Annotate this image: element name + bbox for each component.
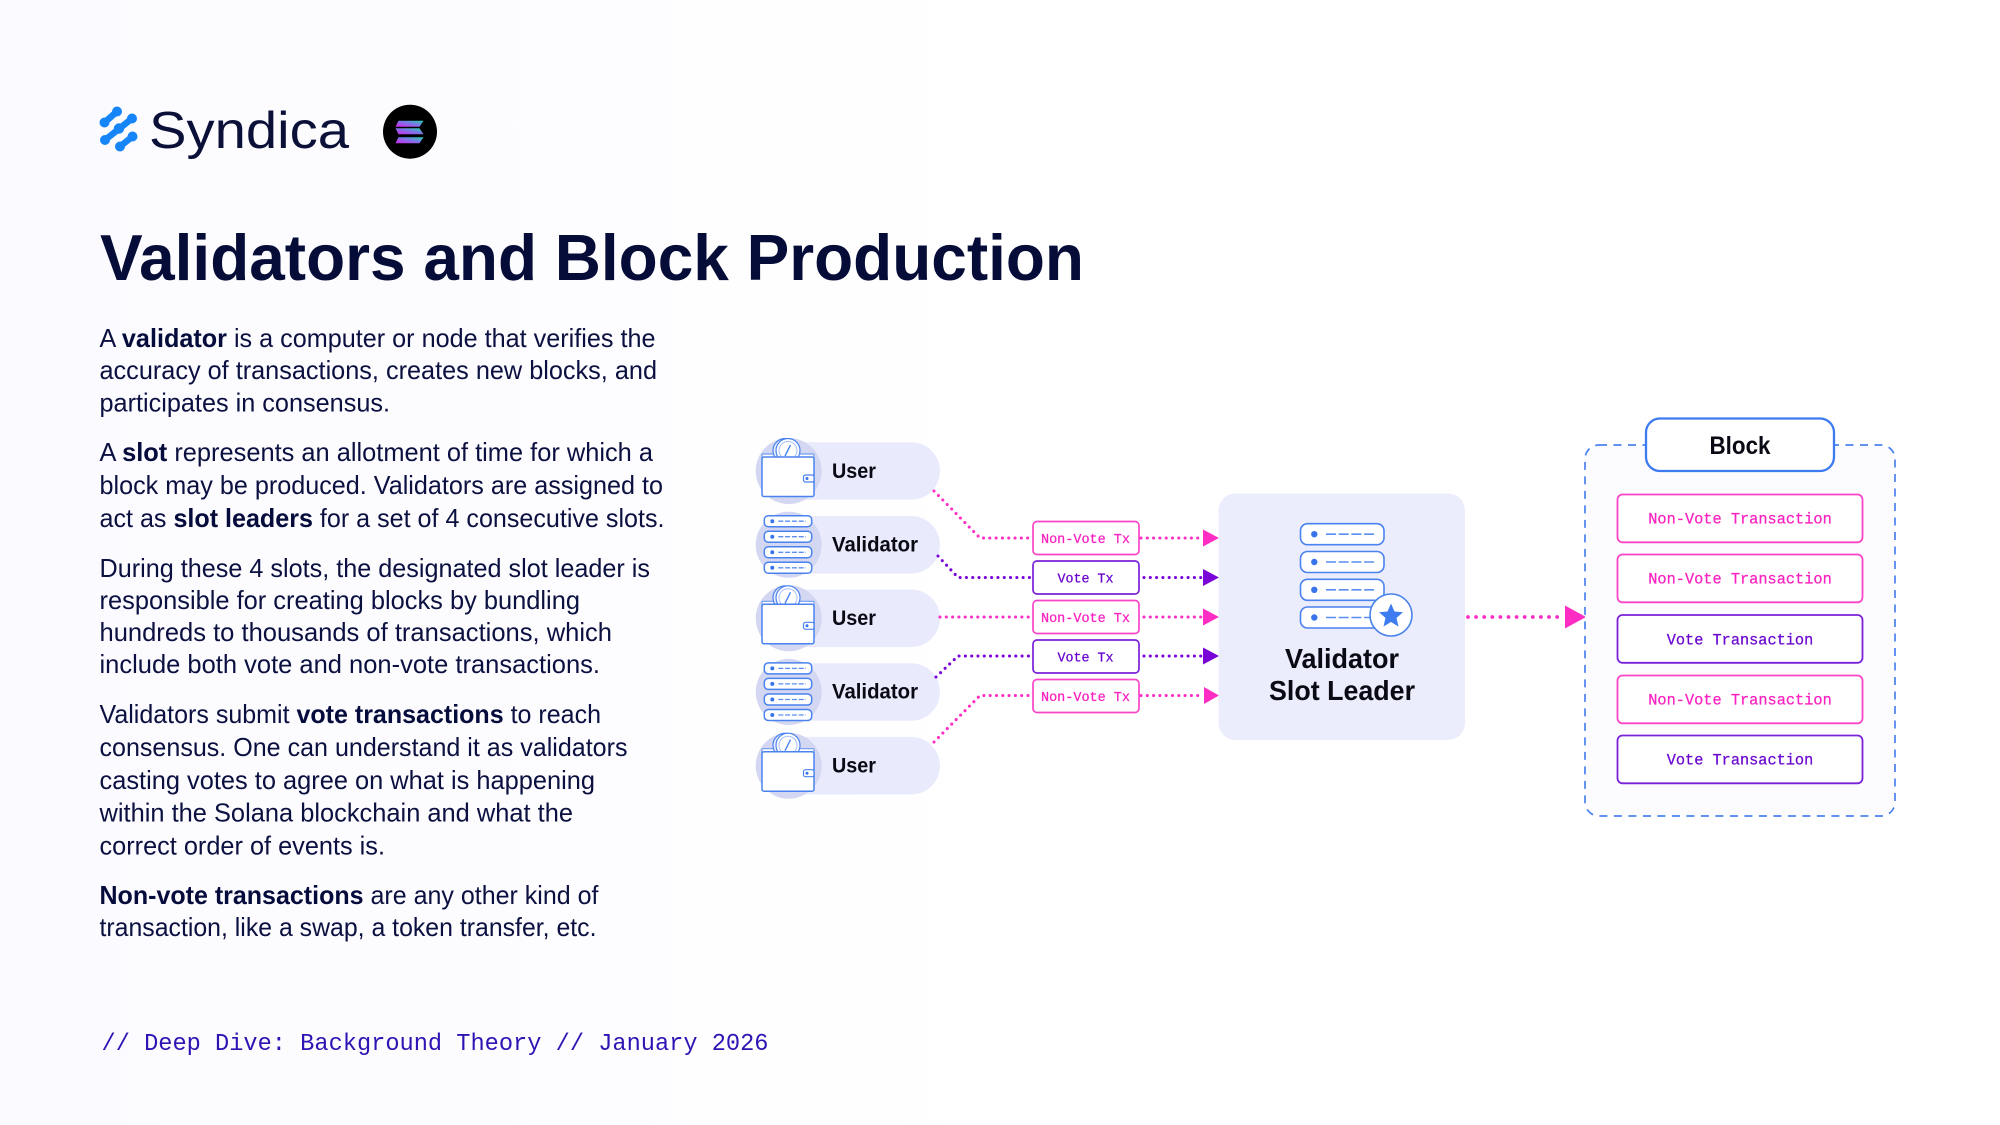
- icon: Solana badge: [383, 105, 437, 159]
- text block: slot definition: A slot represents an allotment of time for which a: [100, 439, 654, 467]
- panel: senders column: [756, 438, 940, 799]
- label: validator slot leader: Slot Leader: [1269, 675, 1415, 706]
- pill: user 2: User: [832, 607, 876, 630]
- text block: slot definition: block may be produced. Validators are assigned to: [100, 472, 663, 500]
- chip: non-vote tx 2: [1033, 600, 1139, 634]
- chip: vote tx 1: Vote Tx: [1058, 572, 1114, 588]
- text block: vote transactions: correct order of events is.: [100, 832, 385, 860]
- chip: non-vote tx 3: [1033, 680, 1139, 712]
- pill: validator 2: Validator: [832, 681, 918, 704]
- panel: transaction chips: [1033, 522, 1139, 712]
- chip: vote tx 2: [1033, 640, 1139, 673]
- text block: validator definition: [100, 325, 657, 418]
- pill: user 3: User: [832, 755, 876, 778]
- chip: non-vote tx 1: Non-Vote Tx: [1041, 533, 1130, 548]
- pill: validator 1: [756, 512, 940, 578]
- text block: validator definition: participates in consensus.: [100, 390, 390, 418]
- row: non-vote transaction 2: [1618, 554, 1862, 602]
- arrow: slot leader to block: [1468, 606, 1586, 628]
- row: non-vote transaction 3: [1618, 676, 1862, 723]
- text block: slot leader duties: hundreds to thousands of transactions, which: [100, 619, 612, 647]
- text block: vote transactions: consensus. One can understand it as validators: [100, 734, 628, 762]
- arrows: transactions to slot leader: [1141, 530, 1219, 704]
- arrows: senders to transactions: [934, 491, 1030, 742]
- text block: slot leader duties: During these 4 slots, the designated slot leader is: [100, 555, 650, 583]
- chip: non-vote tx 2: Non-Vote Tx: [1041, 612, 1130, 627]
- text block: non-vote transactions: transaction, like a swap, a token transfer, etc.: [100, 914, 596, 942]
- chip: non-vote tx 3: Non-Vote Tx: [1041, 691, 1130, 706]
- text block: validator definition: accuracy of transactions, creates new blocks, and: [100, 357, 657, 385]
- heading: block: [1646, 418, 1834, 471]
- title: Validators and Block Production: [100, 221, 1084, 294]
- label: validator slot leader: Validator: [1285, 643, 1399, 674]
- text block: vote transactions: casting votes to agree on what is happening: [100, 767, 595, 795]
- pill: validator 1: Validator: [832, 534, 918, 557]
- text block: slot leader duties: responsible for creating blocks by bundling: [100, 587, 580, 615]
- row: vote transaction 1: Vote Transaction: [1667, 631, 1813, 649]
- text block: non-vote transactions: Non-vote transactions are any other kind of: [100, 882, 599, 910]
- text block: slot leader duties: [100, 555, 650, 679]
- pill: validator 2: [756, 659, 940, 725]
- logo: Syndica: [100, 102, 349, 160]
- chip: vote tx 1: [1033, 561, 1139, 594]
- text block: validator definition: A validator is a computer or node that verifies the: [100, 325, 656, 353]
- icon: Syndica mark: [100, 106, 138, 152]
- row: non-vote transaction 3: Non-Vote Transaction: [1648, 691, 1832, 709]
- row: vote transaction 1: [1618, 615, 1862, 663]
- wordmark: Syndica: [149, 102, 349, 160]
- row: non-vote transaction 1: [1618, 494, 1862, 542]
- chip: vote tx 2: Vote Tx: [1058, 652, 1114, 666]
- icon: server with star: [1300, 524, 1412, 636]
- text block: vote transactions: [99, 701, 628, 860]
- row: vote transaction 2: Vote Transaction: [1667, 752, 1813, 770]
- text block: non-vote transactions: [100, 882, 599, 942]
- heading: block: Block: [1710, 432, 1771, 460]
- text block: slot definition: act as slot leaders for a set of 4 consecutive slots.: [100, 505, 664, 533]
- footer tagline: // Deep Dive: Background Theory // January 2026: [102, 1031, 768, 1058]
- row: non-vote transaction 1: Non-Vote Transaction: [1648, 510, 1832, 528]
- row: vote transaction 2: [1618, 736, 1862, 783]
- panel: validator slot leader: [1218, 494, 1465, 740]
- text block: slot definition: [100, 439, 664, 533]
- panel: block: [1585, 418, 1895, 816]
- chip: non-vote tx 1: [1033, 522, 1139, 554]
- pill: user 1: User: [832, 460, 876, 483]
- row: non-vote transaction 2: Non-Vote Transaction: [1648, 571, 1832, 589]
- pill: user 1: [756, 438, 940, 504]
- pill: user 3: [756, 733, 940, 799]
- text block: vote transactions: within the Solana blockchain and what the: [99, 800, 573, 828]
- text block: slot leader duties: include both vote and non-vote transactions.: [100, 651, 600, 679]
- pill: user 2: [756, 585, 940, 651]
- text block: vote transactions: Validators submit vote transactions to reach: [100, 701, 601, 729]
